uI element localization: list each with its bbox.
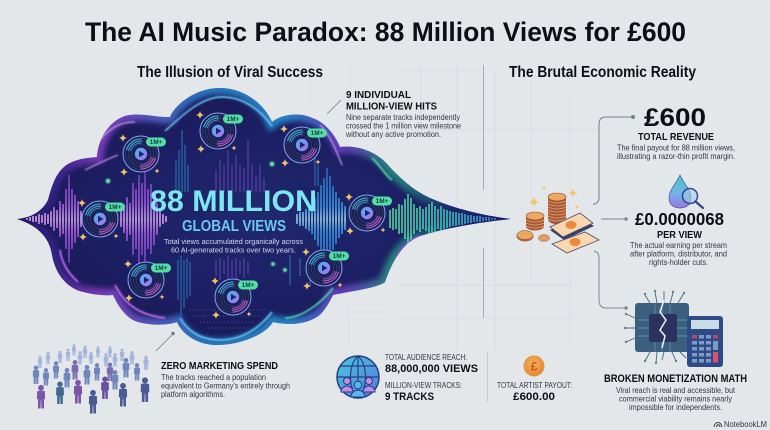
disc: left <box>78 199 125 241</box>
disc: top left: 1M+ <box>150 139 163 146</box>
text: broken monetization math: impossible for independents. <box>629 403 722 412</box>
summary divider <box>486 352 488 402</box>
text: zero marketing spend: The tracks reached a population <box>161 373 266 382</box>
summary: artist payout <box>497 381 572 403</box>
stat: total revenue <box>617 104 735 161</box>
glow specks <box>106 162 287 272</box>
stat: per view <box>630 209 727 267</box>
headline stat: 88 million: Total views accumulated organically across <box>164 237 303 246</box>
stat: per view: £0.0000068 <box>635 209 724 229</box>
callout: million-view hits: Nine separate tracks independently <box>346 113 460 122</box>
disc: top right <box>280 125 327 167</box>
text: zero marketing spend <box>161 360 290 399</box>
headline stat: 88 million: 60 AI-generated tracks over two years. <box>171 246 296 254</box>
summary: audience stats: 88,000,000 VIEWS <box>385 363 478 375</box>
disc: bottom right: 1M+ <box>333 253 346 260</box>
connector: per view <box>601 217 628 221</box>
sound wave: left purple <box>27 171 166 267</box>
stat: per view: rights-holder cuts. <box>649 258 708 267</box>
text: zero marketing spend: equivalent to Germany's entirely through <box>161 382 290 390</box>
headline stat: 88 million <box>150 185 317 254</box>
sound wave: right blue <box>296 168 346 251</box>
text: zero marketing spend: platform algorithms. <box>161 390 225 399</box>
summary: audience stats: TOTAL AUDIENCE REACH: <box>385 353 467 362</box>
callout: million-view hits: without any active promotion. <box>345 130 441 139</box>
disc: top centre <box>196 111 243 153</box>
headline stat: 88 million: 88 MILLION <box>150 185 317 218</box>
halftone dots <box>190 310 265 328</box>
icon: crowd <box>33 344 149 414</box>
text: broken monetization math: BROKEN MONETIZATION MATH <box>604 373 747 385</box>
stat: total revenue: The final payout for 88 million views, <box>617 144 735 152</box>
icon: globe with people <box>337 356 379 398</box>
connector: revenue <box>593 115 635 204</box>
disc: top centre: 1M+ <box>227 116 240 123</box>
callout: million-view hits: crossed the 1 million view milestone <box>346 122 461 130</box>
summary: audience stats <box>385 353 478 403</box>
callout: million-view hits: 9 INDIVIDUAL <box>346 89 412 101</box>
icon: pound coin <box>524 356 544 376</box>
summary: audience stats: MILLION-VIEW TRACKS: <box>385 381 462 390</box>
disc: right <box>345 193 392 235</box>
stat: total revenue: illustrating a razor-thin profit margin. <box>617 152 735 161</box>
text: zero marketing spend: ZERO MARKETING SPEND <box>161 360 278 372</box>
summary: audience stats: 9 TRACKS <box>385 391 434 403</box>
disc: bottom centre: 1M+ <box>242 282 255 289</box>
text: broken monetization math: Viral reach is real and accessible, but <box>616 386 736 395</box>
callout: million-view hits <box>327 89 461 139</box>
title: The AI Music Paradox: 88 Million Views for £600 <box>85 17 686 47</box>
connector: broken math <box>594 251 628 310</box>
text: broken monetization math: commercial viability remains nearly <box>619 394 732 404</box>
icon: drop with magnifier <box>669 175 703 208</box>
stat: per view: PER VIEW <box>657 229 702 241</box>
disc: bottom left: 1M+ <box>155 265 168 272</box>
disc: top right: 1M+ <box>311 130 324 137</box>
text: broken monetization math <box>604 373 747 412</box>
disc: bottom centre <box>211 277 258 319</box>
icon: broken chip and calculator <box>624 290 723 367</box>
sound wave: right green <box>390 194 495 244</box>
stat: per view: The actual earning per stream <box>630 241 727 250</box>
icon: money pile <box>516 186 599 253</box>
summary: artist payout: TOTAL ARTIST PAYOUT: <box>497 381 572 390</box>
icon: pound coin: £ <box>531 360 538 374</box>
disc: left: 1M+ <box>109 204 122 211</box>
disc: top left <box>119 134 166 176</box>
callout: million-view hits: MILLION-VIEW HITS <box>346 100 437 112</box>
headline stat: 88 million: GLOBAL VIEWS <box>182 218 286 235</box>
stat: per view: after platform, distributor, and <box>630 250 727 258</box>
section divider <box>482 65 484 318</box>
stat: total revenue: £600 <box>644 104 706 132</box>
summary: artist payout: £600.00 <box>513 391 555 403</box>
disc: right: 1M+ <box>376 198 389 205</box>
disc: bottom right <box>302 248 349 290</box>
stat: total revenue: TOTAL REVENUE <box>638 131 714 143</box>
disc: bottom left <box>124 260 171 302</box>
sound wave: upper and lower columns <box>176 130 318 316</box>
heading: right section: The Brutal Economic Reality <box>509 64 696 81</box>
leader: zero marketing <box>156 332 175 351</box>
panel: sound cloud <box>17 88 511 345</box>
heading: left section: The Illusion of Viral Success <box>137 64 323 81</box>
